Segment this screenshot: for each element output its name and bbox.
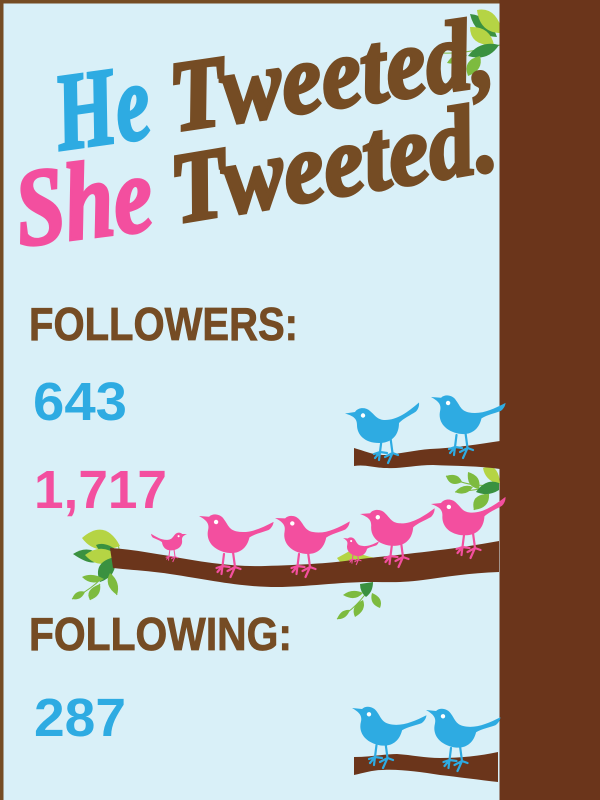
leaf cluster: right of middle branch bbox=[446, 467, 500, 510]
trunk bbox=[500, 0, 600, 800]
heading: following: FOLLOWING: bbox=[29, 608, 292, 660]
bird: blue on upper branch, left bbox=[345, 402, 419, 463]
number: his followers: 643 bbox=[33, 372, 127, 432]
lower branch bbox=[354, 752, 498, 782]
leaf cluster: yellow leaves behind small bird bbox=[337, 549, 376, 562]
leaf cluster: top right bbox=[443, 9, 503, 76]
bird: blue on lower branch, left bbox=[345, 697, 427, 768]
word: She: She bbox=[8, 132, 159, 270]
bird: small pink, left bbox=[151, 529, 189, 562]
bird: small pink, right bbox=[340, 533, 379, 565]
word: He: He bbox=[46, 40, 157, 174]
number: her followers: 1,717 bbox=[34, 460, 167, 520]
number: his following: 287 bbox=[34, 688, 126, 748]
word: Tweeted.: Tweeted. bbox=[162, 81, 504, 245]
bird: blue on lower branch, right bbox=[419, 699, 501, 771]
heading: followers: FOLLOWERS: bbox=[29, 298, 298, 350]
bird: pink 3 bbox=[358, 503, 435, 567]
bird: pink 4 bbox=[429, 493, 506, 558]
middle branch bbox=[110, 541, 499, 587]
bird: pink 2 bbox=[269, 507, 350, 577]
title: He Tweeted, She Tweeted. bbox=[8, 0, 504, 270]
bird: blue on upper branch, right bbox=[424, 386, 506, 458]
leaf cluster: left end of middle branch bbox=[72, 530, 120, 600]
bird: pink 1 bbox=[192, 505, 274, 577]
upper branch bbox=[354, 441, 500, 469]
leaf cluster: under middle branch bbox=[337, 582, 381, 619]
